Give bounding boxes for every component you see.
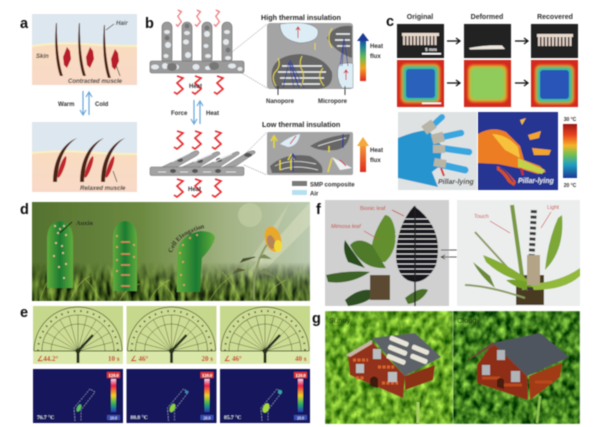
protractor at 10 s: ∠44.2° <box>37 355 59 363</box>
actuated leaf photo: Touch <box>474 214 489 220</box>
skin with contracted muscle <box>32 14 137 85</box>
low insulation inset <box>267 132 353 175</box>
photo row: 5 mm <box>425 47 437 52</box>
hand thermal image <box>478 112 558 190</box>
thermal image 20 s: 80.8 °C <box>130 414 148 421</box>
low insulation heat flux bar: flux <box>370 158 381 164</box>
zoom guide lines <box>232 24 267 175</box>
sunny house photo: Sunny <box>329 316 351 325</box>
low insulation heat flux bar <box>357 137 383 172</box>
nanopore and micropore labels: Micropore <box>318 99 348 105</box>
panel a label: a <box>20 16 29 32</box>
panel d label: d <box>20 202 29 218</box>
gloved hand photo <box>398 112 477 190</box>
skin with contracted muscle: Hair <box>116 21 128 27</box>
reversible arrows <box>441 248 464 259</box>
temperature colour bar: 20 °C <box>564 183 577 189</box>
high insulation heat flux bar <box>357 33 383 81</box>
column headings: Recovered <box>537 14 573 21</box>
protractor at 10 s: 10 s <box>108 355 120 363</box>
skin with relaxed muscle <box>32 122 137 192</box>
temperature colour bar: 30 °C <box>564 117 577 123</box>
photo row <box>397 24 578 58</box>
panel g: houses on grass <box>312 311 580 424</box>
force and heat arrows: Heat <box>206 111 219 117</box>
mimosa and bionic leaf photo: Bionic leaf <box>360 206 386 212</box>
panel b label: b <box>145 16 154 32</box>
low insulation heat flux bar: Heat <box>370 148 383 154</box>
protractor at 40 s <box>220 306 310 364</box>
mimosa and bionic leaf photo <box>325 200 449 306</box>
gloved hand photo: Pillar-lying <box>438 179 475 186</box>
bending shoot with cell elongation label: Cell Elongation <box>168 224 205 253</box>
cloudy house photo: Cloudy <box>457 316 481 325</box>
plant shoot with auxin <box>47 220 93 288</box>
protractor at 40 s: ∠ 46° <box>224 355 242 363</box>
hand thermal image: Pillar-lying <box>518 178 555 185</box>
thermal image 40 s <box>220 369 310 423</box>
high insulation heat flux bar: Heat <box>370 44 383 50</box>
heat waves: Heat <box>188 187 201 193</box>
sunflower <box>232 224 284 300</box>
panel e label: e <box>20 305 28 321</box>
panel f: mimosa and bionic leaf <box>316 200 580 306</box>
high insulation heat flux bar: flux <box>370 54 381 60</box>
temperature colour bar <box>563 117 577 189</box>
high insulation inset <box>267 23 353 89</box>
protractor at 20 s: 20 s <box>202 355 213 363</box>
column headings: Deformed <box>471 14 503 21</box>
panel d: plant phototropism illustration <box>20 201 311 302</box>
mimosa and bionic leaf photo: Mimosa leaf <box>331 224 361 230</box>
thermal image 10 s <box>33 369 123 423</box>
protractor at 40 s: 40 s <box>295 355 307 363</box>
panel c label: c <box>386 14 394 30</box>
thermal image 40 s: 85.7 °C <box>224 414 241 421</box>
nanopore and micropore labels: Nanopore <box>266 99 295 105</box>
protractor at 20 s: ∠ 46° <box>130 355 149 363</box>
skin with relaxed muscle: Relaxed muscle <box>80 186 126 192</box>
warm and cold arrows: Warm <box>58 102 74 108</box>
black arrows <box>447 38 528 86</box>
actuated leaf photo: Light <box>547 205 559 211</box>
panel g label: g <box>312 311 321 327</box>
scene background <box>32 202 310 301</box>
column headings <box>407 14 573 21</box>
panel c: photos and thermal images <box>386 14 578 190</box>
warm and cold arrows: Cold <box>95 102 109 108</box>
panel e: bending angle and thermal images <box>20 305 310 423</box>
tilted pillar structure <box>150 151 255 176</box>
skin with contracted muscle: Skin <box>36 54 49 60</box>
warm and cold arrows <box>58 91 109 115</box>
force and heat arrows: Force <box>171 111 188 117</box>
sunny house photo <box>325 311 453 424</box>
skin with contracted muscle: Contracted muscle <box>68 79 123 85</box>
protractor at 10 s <box>33 306 123 364</box>
high thermal insulation heading: High thermal insulation <box>261 13 341 22</box>
material legend: SMP composite <box>310 182 355 188</box>
column headings: Original <box>407 14 433 21</box>
plant shoot with elongating cells <box>113 221 137 291</box>
nanopore and micropore labels <box>266 86 348 105</box>
heat waves: Heat <box>189 84 202 90</box>
material legend: Air <box>310 192 319 198</box>
panel b: thermal insulation diagram <box>145 10 383 198</box>
bending shoot with cell elongation label <box>168 224 216 293</box>
cloudy house photo <box>453 311 580 424</box>
thermal image 20 s <box>126 369 216 423</box>
low thermal insulation heading: Low thermal insulation <box>262 120 340 129</box>
plant shoot with auxin: Auxin <box>76 220 93 227</box>
force and heat arrows <box>171 100 219 124</box>
panel f label: f <box>316 202 321 218</box>
heat waves <box>174 10 223 197</box>
protractor at 20 s <box>126 306 216 364</box>
thermal image 10 s: 76.7 °C <box>37 414 54 421</box>
upright pillar structure <box>150 22 244 73</box>
thermal row <box>397 60 578 107</box>
panel a: skin and hair diagram <box>20 14 137 192</box>
actuated leaf photo <box>457 200 580 306</box>
material legend <box>292 181 355 198</box>
